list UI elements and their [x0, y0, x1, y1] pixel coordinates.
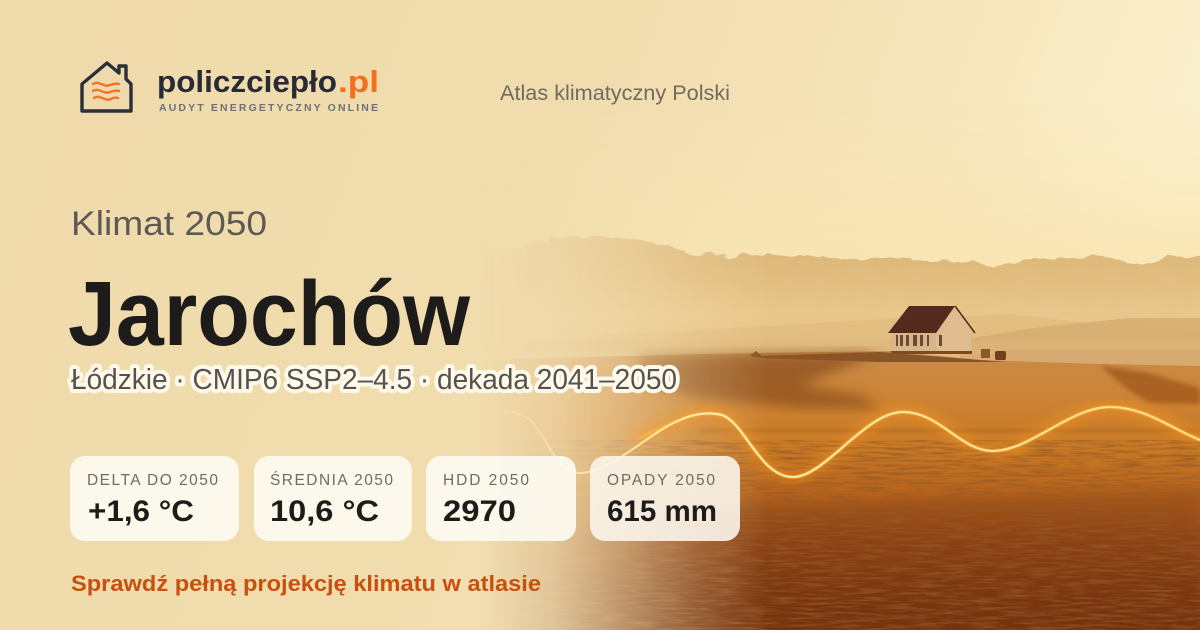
- distant hills: [747, 314, 1081, 332]
- wordmark domain: .pl: [338, 64, 379, 99]
- card: delta: DELTA DO 2050: [87, 472, 218, 489]
- card: precipitation: OPADY 2050: [607, 472, 715, 489]
- card: HDD: 2970: [443, 495, 516, 528]
- card: HDD: HDD 2050: [443, 472, 529, 489]
- card: precipitation: 615 mm: [607, 495, 717, 528]
- card: delta: +1,6 °C: [88, 495, 194, 528]
- card: average: ŚREDNIA 2050: [270, 471, 393, 489]
- logo: policzciepło.pl: [82, 63, 379, 114]
- dark bottom field: [698, 489, 1200, 562]
- call to action: Sprawdź pełną projekcję klimatu w atlasie: [71, 571, 541, 596]
- card: delta: [70, 456, 239, 541]
- card: precipitation: [590, 456, 740, 541]
- title: town name: Jarochów: [68, 263, 470, 365]
- card: HDD: [426, 456, 576, 541]
- eyebrow heading: Klimat 2050: [71, 205, 267, 243]
- icon: house with heat waves: [82, 63, 131, 111]
- golden field: [500, 351, 1200, 630]
- treeline: [542, 235, 1200, 358]
- icon: house: [750, 306, 1006, 362]
- tagline: AUDYT ENERGETYCZNY ONLINE: [159, 102, 378, 114]
- stat cards: [70, 456, 740, 541]
- card: average: [254, 456, 412, 541]
- heat wave line glowing: [497, 407, 1200, 477]
- wordmark: policzciepło: [157, 64, 337, 99]
- landscape photo: sunset fields with house: [500, 164, 1200, 630]
- header label: Atlas klimatyczny Polski: [500, 82, 730, 105]
- subtitle with halo: Łódzkie · CMIP6 SSP2–4.5 · dekada 2041–2050: [71, 364, 677, 396]
- field shadow: [640, 352, 880, 408]
- grain texture: [572, 440, 1200, 630]
- card: average: 10,6 °C: [270, 495, 379, 528]
